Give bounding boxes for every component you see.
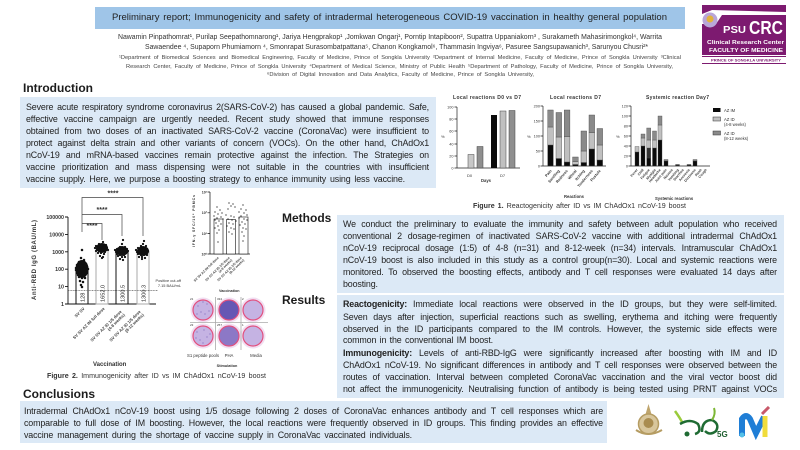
- chart: anti-RBD IgG: 100000: [46, 215, 64, 221]
- panel: methods text: nCoV-19 reciprocal dosage (1:5) of 4-8 (n=31) and 8-12-week (n=34) intervals. Intramuscular ChAdOx1: [343, 243, 777, 253]
- affiliations: [119, 55, 681, 78]
- chart: local reactions D7: 200: [534, 104, 540, 108]
- panel: results text: routes of vaccination. Interval between completed CoronaVac vaccination and the viral vector boost did: [343, 372, 777, 382]
- chart: local reactions D7: [527, 95, 606, 199]
- logo: PSU CRC: [702, 5, 786, 64]
- legend: reactogenicity groups: [712, 108, 749, 141]
- image: ELISpot wells: 2: [242, 297, 244, 301]
- logo: 5G: [674, 408, 728, 439]
- panel: conclusions text: comparable to full dose of IM boosting. However, the local reactions were frequently observed in ID groups. This finding provides an effective: [24, 418, 603, 428]
- legend: reactogenicity groups: (8-12 weeks): [724, 136, 749, 141]
- chart: IFN-gamma ELISpot: 10⁰: [202, 252, 208, 256]
- significance brackets: ****: [108, 190, 119, 198]
- chart: local reactions D7: Wheal: [567, 168, 578, 180]
- legend: reactogenicity groups: AZ ID: [724, 131, 735, 136]
- chart: anti-RBD IgG: SV SV: [73, 306, 86, 318]
- chart: anti-RBD IgG: 128: [80, 293, 86, 302]
- logo: PSU CRC: Clinical Research Center: [707, 40, 785, 46]
- legend: reactogenicity groups: (4-8 weeks): [724, 122, 746, 127]
- heading: Methods: Methods: [282, 211, 331, 225]
- panel: introduction text: protect against delta strain and other variants of concern (VOCs). On the other hand, ChAdOx1: [26, 138, 429, 148]
- chart: anti-RBD IgG: SV SV AZ IM full dose: [72, 306, 106, 340]
- chart: anti-RBD IgG: Vaccination: [93, 362, 127, 368]
- chart: anti-RBD IgG: (4-8 weeks): [106, 312, 126, 332]
- heading: Introduction: Introduction: [23, 81, 93, 95]
- chart: IFN-gamma ELISpot: 10¹: [202, 232, 208, 236]
- image: ELISpot wells: 21: [190, 297, 194, 301]
- logo: 5G: 5G: [717, 430, 728, 439]
- panel: introduction text: obtained from two doses of an inactivated SARS-CoV-2 vaccine (CoronaVac) were insufficient to: [26, 126, 429, 136]
- chart: local reactions D7: Swelling: [547, 168, 561, 184]
- chart: systemic reaction day 7: Diarrhea: [673, 168, 685, 182]
- panel: introduction text: vaccine supply. Here, we purpose a boosting strategy to enhance immunity using less vaccine.: [26, 174, 405, 184]
- image: ELISpot wells: 23: [190, 323, 194, 327]
- chart: systemic reaction day 7: Anorexia: [678, 168, 691, 182]
- chart: local reactions D0 vs D7: 80: [449, 118, 454, 122]
- chart: anti-RBD IgG: 10: [58, 285, 64, 291]
- panel: results text: Immunogenicity: Levels of anti-RBD-IgG were significantly increased after boosting with IM and ID: [343, 348, 777, 358]
- chart: IFN-gamma ELISpot: SV SV AZ ID 1/5 dose: [216, 256, 243, 282]
- affiliations: ⁶Division of Digital Innovation and Data Analytics, Faculty of Medicine, Prince of Songkla University,: [267, 72, 534, 78]
- chart: anti-RBD IgG: 10000: [49, 232, 64, 238]
- chart: local reactions D0 vs D7: [441, 95, 521, 183]
- chart: local reactions D0 vs D7: 60: [449, 130, 454, 134]
- chart: anti-RBD IgG: [32, 190, 182, 368]
- chart: anti-RBD IgG: 1300.5: [120, 285, 126, 302]
- chart: systemic reaction day 7: %: [616, 134, 620, 139]
- title text: Preliminary report; Immunogenicity and safety of intradermal heterogeneous COVID-19 vaccination in healthy general population: [112, 12, 667, 23]
- image: ELISpot wells: 257: [217, 323, 222, 327]
- panel: conclusions text: vaccine management during the shortage of vaccine supply in CoronaVac vaccinated individuals.: [24, 430, 412, 440]
- logo: M: [739, 406, 770, 440]
- chart: anti-RBD IgG: 1300.3: [142, 285, 148, 302]
- panel: methods text: We conduct the preliminary to evaluate the immunity and safety between adult population who received: [343, 219, 777, 229]
- chart: systemic reaction day 7: Headache: [648, 168, 662, 183]
- panel: methods text: nCoV-19 boost is also included in this study as a control group(n=30). Local and systemic reactions were: [343, 255, 777, 265]
- chart: local reactions D7: Itching: [574, 168, 586, 181]
- significance brackets: ****: [87, 223, 98, 230]
- chart: local reactions D7: Local reactions D7: [550, 95, 601, 101]
- heading: Conclusions: Conclusions: [23, 387, 95, 401]
- panel: methods text: [337, 215, 784, 293]
- chart: systemic reaction day 7: Systemic reaction Day7: [646, 95, 709, 101]
- chart: systemic reaction day 7: 80: [624, 124, 628, 128]
- chart: IFN-gamma ELISpot: Vaccination: [219, 289, 240, 293]
- chart: systemic reaction day 7: Fever: [630, 168, 639, 178]
- chart: local reactions D0 vs D7: 20: [449, 154, 454, 158]
- logo: PSU CRC: PSU: [723, 24, 746, 36]
- panel: methods text: monitored. To observed the boosting effects, antibody and T cell responses were evaluated 14 days after: [343, 267, 777, 277]
- title banner: [95, 7, 685, 29]
- chart: systemic reaction day 7: 100: [622, 114, 628, 118]
- chart: local reactions D7: 50: [536, 150, 540, 154]
- chart: anti-RBD IgG: Anti-RBD IgG (BAU/mL): [32, 220, 38, 300]
- panel: results text: observed in the ID participants compared to the IM controls. However, the systemic side effects were: [343, 324, 777, 334]
- image: ELISpot wells: S1 peptide pools: [187, 353, 219, 358]
- chart: systemic reaction day 7: 120: [622, 104, 628, 108]
- chart: systemic reaction day 7: Dizziness: [683, 168, 697, 183]
- panel: introduction text: effective vaccine campaign are urgently needed. Recent study showed that immune responses: [26, 114, 429, 124]
- image: ELISpot wells: Media: [250, 353, 262, 358]
- chart: anti-RBD IgG: 100: [55, 267, 64, 273]
- chart: local reactions D7: Reactions: [564, 194, 585, 199]
- image: ELISpot wells: [187, 297, 268, 368]
- chart: local reactions D7: Pustule: [589, 168, 602, 182]
- affiliations: Research Center, Faculty of Medicine, Prince of Songkla University ⁴Department of Medical Science, Ministry of Public Health ⁵Department of Pathology, Faculty of Medicine, Prince of Songkla University,: [126, 64, 673, 70]
- chart: systemic reaction day 7: 60: [624, 134, 628, 138]
- image: ELISpot wells: 334: [217, 297, 222, 301]
- panel: results text: [337, 295, 784, 398]
- chart: systemic reaction day 7: Fatigue: [640, 168, 651, 180]
- heading: Results: Results: [282, 293, 325, 307]
- significance brackets: ****: [97, 207, 108, 214]
- image: ELISpot wells: Stimulation: [217, 364, 238, 368]
- chart: systemic reaction day 7: Cough: [698, 168, 708, 179]
- chart: IFN-gamma ELISpot: (8-12 weeks): [228, 258, 245, 275]
- image: ELISpot wells: PHA: [225, 353, 234, 358]
- affiliations: ¹Department of Biomedical Sciences and Biomedical Engineering, Faculty of Medicine, Prince of Songkla University ²Department of Internal Medicine, Faculty of Medicine, Prince of Songkla University ³Clinical: [119, 55, 681, 61]
- panel: conclusions text: [20, 401, 607, 443]
- author list: Sawaendee ⁴, Supaporn Phumiamorn ⁴, Smonrapat Surasombatpattana⁵, Chanon Kongkamol⁶, Thammasin Ingviya⁶, Pasuree Sangsupawanich³, Sarunyou Chusri²*: [145, 44, 648, 50]
- image: ELISpot wells: 1: [242, 323, 244, 327]
- chart: IFN-gamma ELISpot: 10²: [202, 211, 208, 215]
- chart: IFN-gamma ELISpot: 10³: [202, 190, 208, 194]
- chart: local reactions D0 vs D7: Days: [481, 178, 492, 183]
- chart: local reactions D7: 150: [534, 120, 540, 124]
- chart: anti-RBD IgG: Positive cut-off: [156, 278, 182, 283]
- chart: anti-RBD IgG: 1000: [52, 250, 64, 256]
- chart: systemic reaction day 7: Rash: [694, 168, 703, 177]
- chart: local reactions D7: 100: [534, 134, 540, 138]
- figure 2 caption: Figure 2. Immunogenicity after ID vs IM ChAdOx1 nCoV-19 boost: [47, 372, 266, 380]
- chart: local reactions D0 vs D7: 40: [449, 142, 454, 146]
- chart: systemic reaction day 7: Systemic reactions: [655, 196, 694, 201]
- chart: IFN-gamma ELISpot: (4-8 weeks): [218, 258, 233, 274]
- chart: local reactions D0 vs D7: 0: [451, 166, 454, 170]
- panel: results text: not affect the immunogenicity. Neutralising function of antibody is being tested using PRNT against VOCs: [343, 384, 777, 394]
- chart: local reactions D0 vs D7: %: [441, 134, 445, 139]
- chart: systemic reaction day 7: 0: [626, 164, 628, 168]
- chart: systemic reaction day 7: Chill: [637, 168, 645, 176]
- chart: local reactions D0 vs D7: D7: [500, 173, 506, 178]
- logo: PSU CRC: CRC: [749, 18, 783, 38]
- chart: systemic reaction day 7: Vomiting: [667, 168, 680, 182]
- panel: introduction text: [20, 97, 436, 188]
- chart: local reactions D0 vs D7: 100: [447, 106, 454, 110]
- panel: results text: Seven days after injection, superficial reactions such as swelling, erythema and itching were frequently: [343, 312, 777, 322]
- chart: local reactions D7: 0: [538, 164, 540, 168]
- logo: PSU CRC: FACULTY OF MEDICINE: [709, 48, 783, 54]
- chart: local reactions D7: Pain: [544, 168, 553, 178]
- panel: results text: Reactogenicity: Immediate local reactions were observed in the ID groups, but they were self-limited.: [343, 299, 777, 309]
- panel: methods text: conventional 2 dosage-regimen of inactivated SARS-CoV-2 vaccine with additional intradermal ChAdOx1: [343, 231, 777, 241]
- panel: results text: ChAdOx1 nCoV-19. No significant differences in antibody and T cell responses were observed between the: [343, 360, 777, 370]
- chart: anti-RBD IgG: 7.15 BAU/mL: [158, 283, 182, 288]
- panel: methods text: boosting.: [343, 279, 378, 289]
- figure 1 caption: Figure 1. Reactogenicity after ID vs IM ChAdOx1 nCoV-19 boost: [473, 202, 686, 210]
- chart: IFN-gamma ELISpot: IFN-γ SFC/10⁶ PBMCs: [192, 195, 196, 247]
- chart: local reactions D0 vs D7: D0: [467, 173, 473, 178]
- chart: local reactions D7: Tenderness: [576, 168, 594, 188]
- logo: PSU CRC: PRINCE OF SONGKLA UNIVERSITY: [711, 58, 781, 62]
- chart: systemic reaction day 7: 40: [624, 144, 628, 148]
- panel: conclusions text: Intradermal ChAdOx1 nCoV-19 boost using 1/5 dosage following 2 doses of CoronaVac enhances antibody and T cell responses which are: [24, 406, 603, 416]
- chart: anti-RBD IgG: 1: [61, 302, 64, 308]
- panel: introduction text: nCoV-19 and mRNA-based vaccines remain protective against the infection. The Strategies on: [26, 150, 429, 160]
- chart: IFN-gamma ELISpot: SV SV AZ ID 1/5 dose: [204, 256, 231, 282]
- legend: reactogenicity groups: AZ ID: [724, 117, 735, 122]
- chart: IFN-gamma ELISpot: [192, 190, 250, 293]
- chart: anti-RBD IgG: (8-12 weeks): [124, 312, 145, 334]
- chart: anti-RBD IgG: 1652.0: [100, 285, 106, 302]
- chart: systemic reaction day 7: [616, 95, 710, 201]
- panel: introduction text: Severe acute respiratory syndrome coronavirus 2(SARS-CoV-2) has caused a global pandemic. Safe,: [26, 102, 429, 112]
- panel: results text: common in the conventional IM boost.: [343, 335, 493, 345]
- author list: Nawamin Pinpathomrat¹, Purilap Seepathomnarong¹, Jariya Hengprakop¹ ,Jomkwan Ongarj¹, Porntip Intapiboon², Supattra Uppaniakorn³ , Surakameth Mahasirimongkol⁴, Warrita: [118, 34, 662, 41]
- logo: university seal: [636, 404, 662, 435]
- significance brackets: [82, 190, 143, 240]
- chart: local reactions D7: Redness: [555, 168, 569, 184]
- chart: local reactions D7: %: [527, 134, 531, 139]
- legend: reactogenicity groups: AZ IM: [724, 108, 736, 113]
- chart: systemic reaction day 7: Joint pain: [654, 168, 668, 183]
- chart: systemic reaction day 7: Myalgia: [645, 168, 657, 180]
- chart: anti-RBD IgG: SV SV AZ ID 1/5 dose: [89, 309, 123, 343]
- author list: [118, 34, 662, 50]
- chart: anti-RBD IgG: SV SV AZ ID 1/5 dose: [108, 309, 142, 343]
- chart: IFN-gamma ELISpot: SV SV AZ IM full dose: [193, 256, 220, 283]
- panel: introduction text: vaccine prioritization and mass dispensing were not suitable in the countries with insufficient: [26, 162, 429, 172]
- chart: systemic reaction day 7: 20: [624, 154, 628, 158]
- chart: local reactions D0 vs D7: Local reactions D0 vs D7: [453, 95, 521, 101]
- chart: systemic reaction day 7: Nausea: [663, 168, 674, 180]
